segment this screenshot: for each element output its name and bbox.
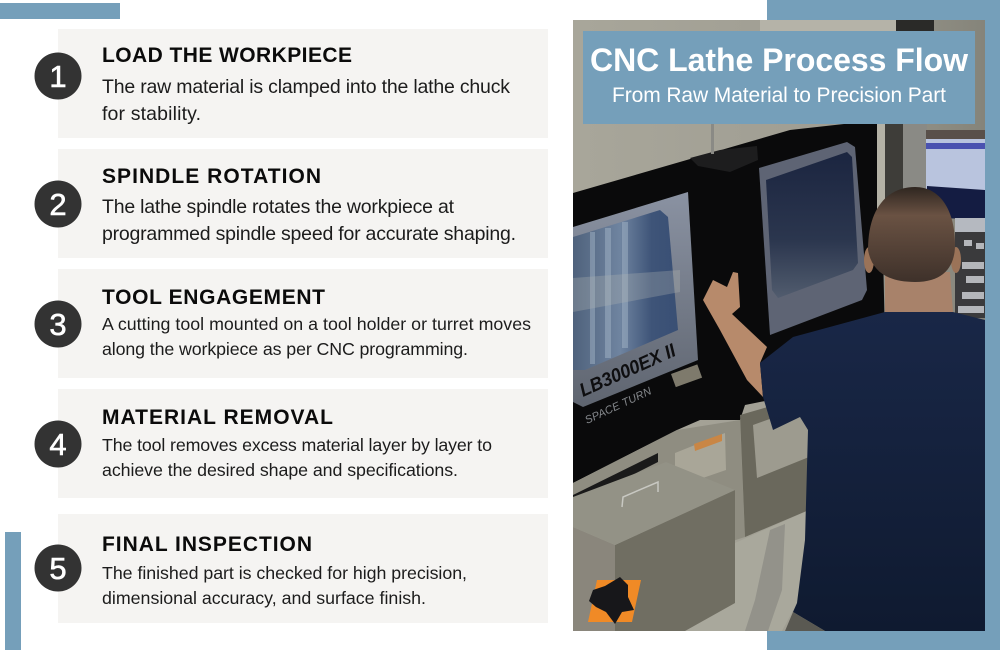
- navy shirt: [760, 312, 985, 631]
- panel: step 1: [34, 29, 548, 138]
- text: step 4 description: The tool removes excess material layer by layer to: [102, 435, 492, 455]
- arm and hand: [703, 272, 767, 397]
- text: machine series label: SPACE TURN: [583, 385, 654, 427]
- text: step 2 description: The lathe spindle rotates the workpiece at: [102, 196, 455, 218]
- text: step 3 description: along the workpiece as per CNC programming.: [102, 339, 468, 359]
- text: step 2 description: [102, 196, 516, 245]
- text: step 5 description: [102, 563, 467, 608]
- text: step 1 description: The raw material is clamped into the lathe chuck: [102, 76, 510, 98]
- text: step 5 description: dimensional accuracy, and surface finish.: [102, 588, 426, 608]
- keypad: [955, 218, 985, 318]
- icon: number 1: 1: [49, 59, 67, 94]
- icon: number 2: [34, 180, 82, 228]
- text: step 5 description: The finished part is checked for high precision,: [102, 563, 467, 583]
- text: step 4 description: [102, 435, 492, 480]
- icon: number 5: 5: [49, 551, 67, 586]
- icon: number 2: 2: [49, 187, 67, 222]
- title: CNC Lathe Process Flow: [590, 42, 968, 78]
- text: step 1 description: for stability.: [102, 103, 201, 125]
- panel: step 5: [34, 514, 548, 623]
- panel: step 2: [34, 149, 548, 258]
- heading: final inspection: FINAL INSPECTION: [102, 533, 312, 556]
- icon: number 1: [34, 52, 82, 100]
- text: step 1 description: [102, 76, 510, 125]
- heading: material removal: MATERIAL REMOVAL: [102, 406, 333, 429]
- storage box: [573, 462, 735, 631]
- monitor: [926, 130, 985, 219]
- panel: step 3: [34, 269, 548, 378]
- top left accent bar: [0, 3, 120, 19]
- logo: orange badge with boar: [588, 577, 641, 624]
- text: step 3 description: A cutting tool mounted on a tool holder or turret moves: [102, 314, 531, 334]
- text: step 4 description: achieve the desired shape and specifications.: [102, 460, 458, 480]
- right blue background panel: [767, 0, 1000, 650]
- subtitle: From Raw Material to Precision Part: [612, 84, 946, 107]
- heading: load the workpiece: LOAD THE WORKPIECE: [102, 44, 352, 67]
- text: machine model label: LB3000EX II: [576, 340, 680, 402]
- title panel: [583, 31, 975, 124]
- text: step 2 description: programmed spindle speed for accurate shaping.: [102, 223, 516, 245]
- heading: tool engagement: TOOL ENGAGEMENT: [102, 286, 325, 309]
- heading: spindle rotation: SPINDLE ROTATION: [102, 165, 321, 188]
- icon: number 3: 3: [49, 307, 67, 342]
- icon: number 4: [34, 420, 82, 468]
- photo: operator at CNC lathe: [573, 20, 985, 631]
- text: step 3 description: [102, 314, 531, 359]
- bottom left accent bar: [5, 532, 21, 650]
- panel: step 4: [34, 389, 548, 498]
- icon: number 5: [34, 544, 82, 592]
- head: [864, 187, 961, 314]
- icon: number 4: 4: [49, 427, 67, 462]
- icon: number 3: [34, 300, 82, 348]
